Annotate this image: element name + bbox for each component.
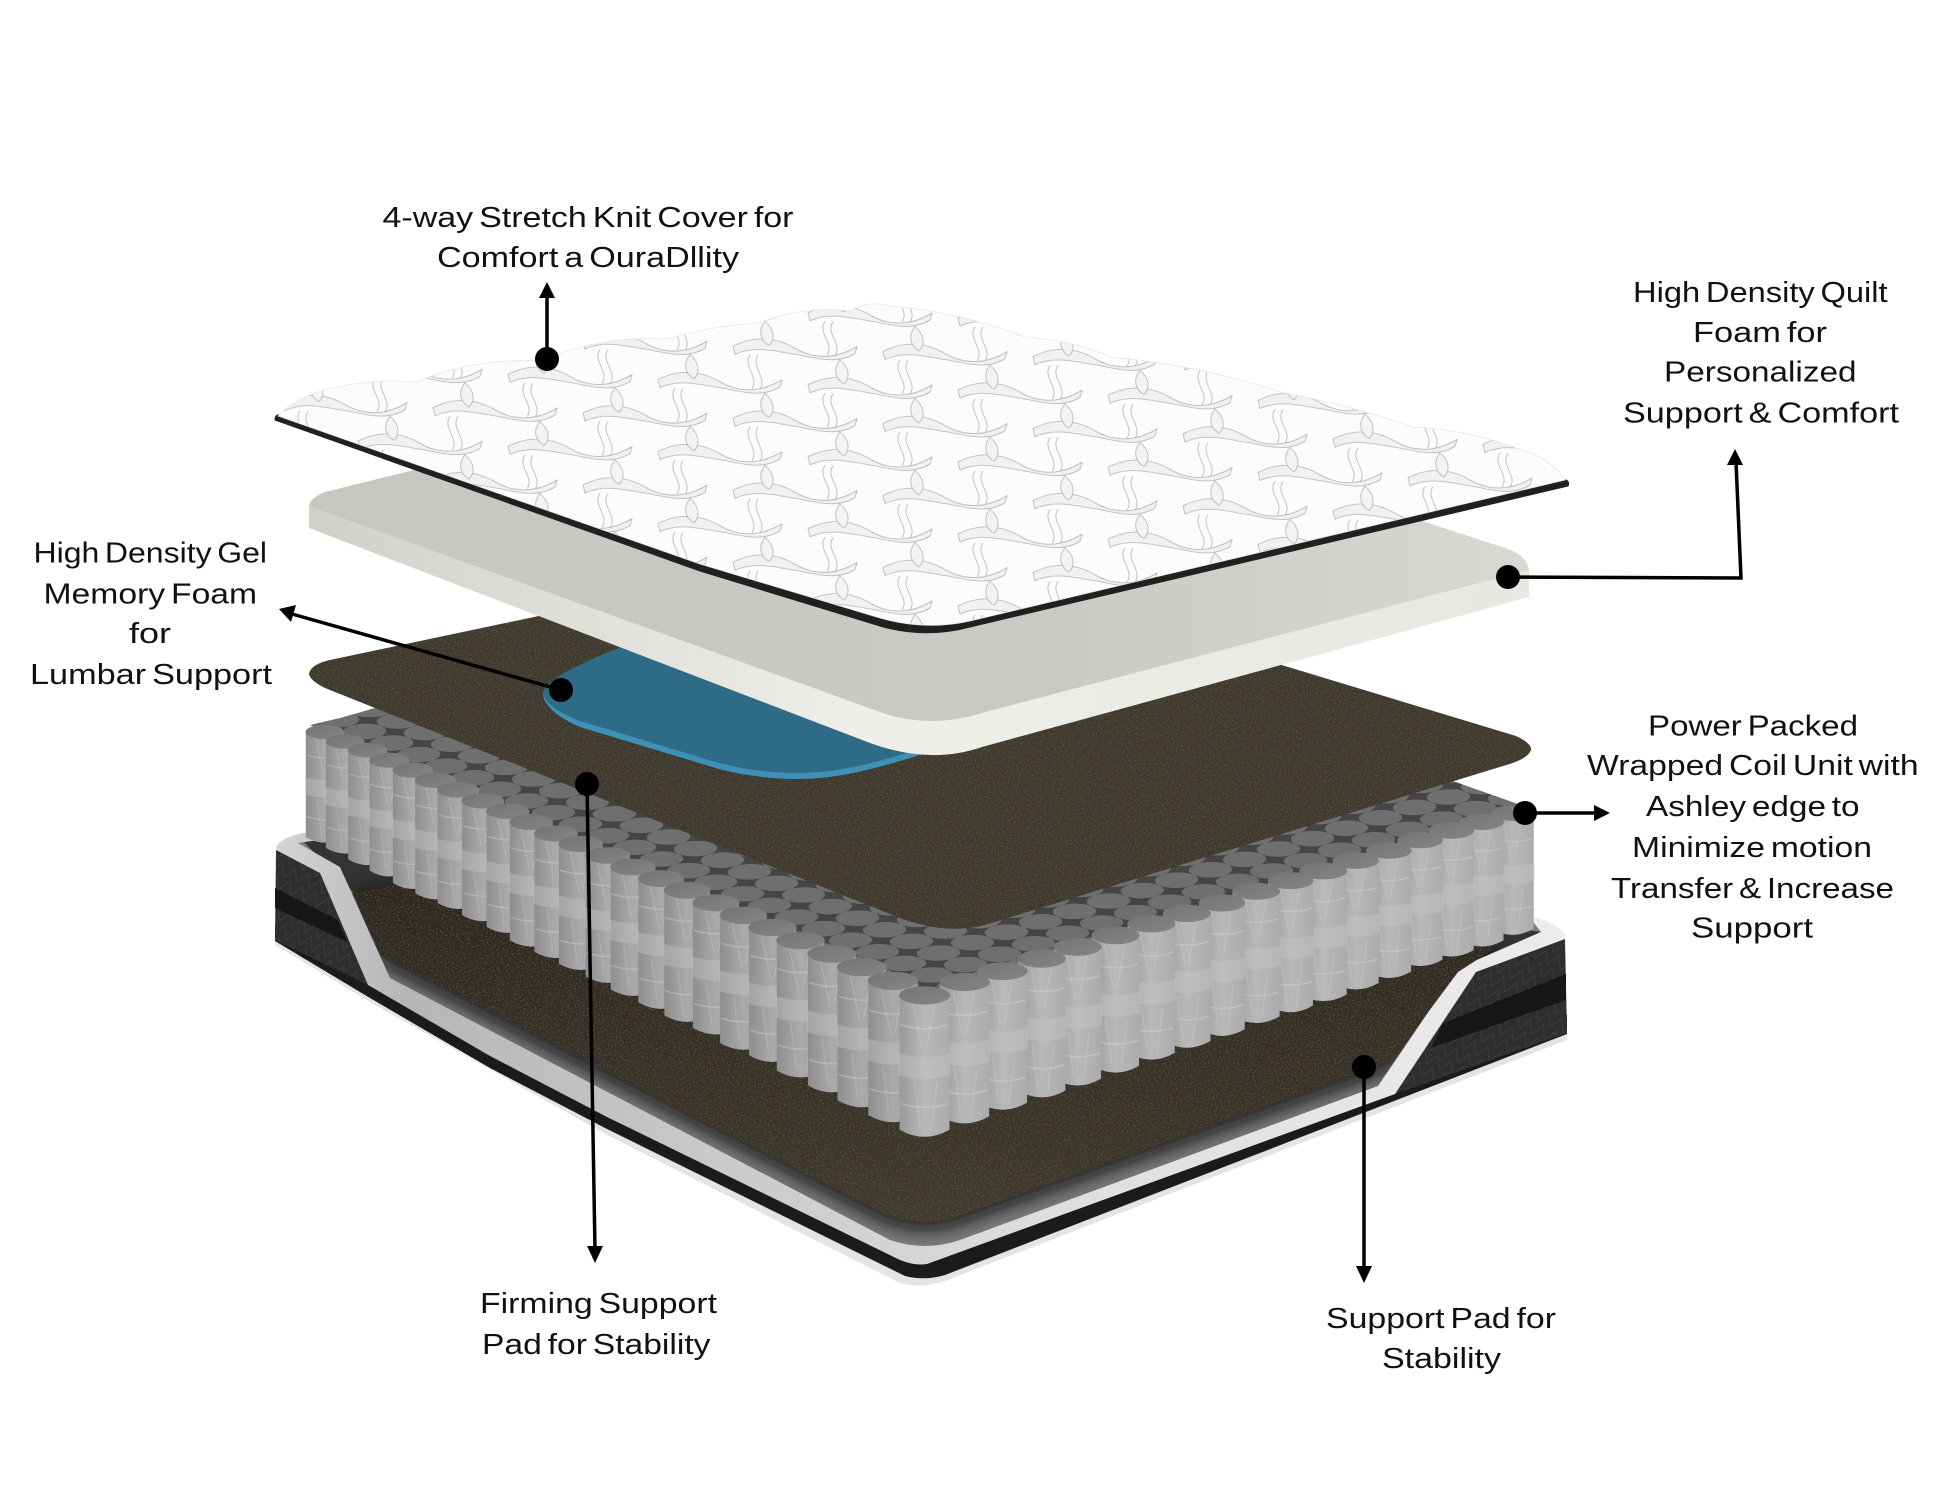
left coil row <box>305 725 918 1122</box>
callout: support pad label: Stability <box>1382 1343 1502 1375</box>
callout: knit cover label: 4-way Stretch Knit Cover for <box>382 202 794 234</box>
callout: quilt foam label <box>1623 277 1899 430</box>
callout: quilt foam label: Foam for <box>1693 317 1827 349</box>
callout: coil unit label: Wrapped Coil Unit with <box>1587 750 1919 782</box>
callout: gel memory foam label <box>30 538 272 691</box>
callout: coil unit label: Power Packed <box>1648 710 1858 742</box>
callout: coil unit label <box>1587 710 1919 945</box>
callout: firming pad label: Pad for Stability <box>482 1329 711 1361</box>
coil tops lattice <box>310 650 1535 1020</box>
tray floor <box>298 840 1541 1246</box>
front corner coil <box>899 986 951 1137</box>
callout: gel memory foam label: Memory Foam <box>44 579 257 611</box>
knit cover top layer <box>275 304 1569 633</box>
callout: quilt foam arrow <box>1496 449 1743 589</box>
callout: knit cover label: Comfort a OuraDllity <box>437 242 740 274</box>
wrapped coil unit <box>305 650 1535 1137</box>
right coil row <box>939 805 1535 1123</box>
callout: quilt foam label: High Density Quilt <box>1633 277 1888 309</box>
right foam wedge <box>1395 939 1567 1094</box>
quilt foam layer <box>309 350 1529 755</box>
callout: gel memory foam label: for <box>129 618 171 650</box>
callout: support pad label <box>1326 1303 1556 1375</box>
callout: quilt foam label: Support & Comfort <box>1623 398 1899 430</box>
callout: coil unit label: Transfer & Increase <box>1611 873 1894 905</box>
callout: firming pad label: Firming Support <box>480 1288 717 1320</box>
left foam wedge <box>275 850 368 985</box>
gel memory foam lumbar insert <box>543 640 935 779</box>
callout: quilt foam label: Personalized <box>1664 356 1856 388</box>
callout: coil unit label: Support <box>1691 913 1813 945</box>
mattress illustration <box>275 304 1570 1286</box>
lower support pad <box>352 800 1500 1222</box>
callout: support pad arrow <box>1352 1055 1376 1283</box>
infographic canvas <box>32 206 1916 1374</box>
callout: gel memory foam arrow <box>279 605 573 702</box>
callout: gel memory foam label: High Density Gel <box>34 538 267 570</box>
base tray with foam encasement <box>275 832 1567 1286</box>
callout: coil unit arrow <box>1513 801 1610 825</box>
callout: gel memory foam label: Lumbar Support <box>30 659 272 691</box>
callout: knit cover arrow <box>535 282 559 371</box>
callout: coil unit label: Minimize motion <box>1632 832 1872 864</box>
firming support pad <box>309 582 1531 929</box>
callout: support pad label: Support Pad for <box>1326 1303 1556 1335</box>
callout: knit cover label <box>382 202 794 274</box>
callout: firming pad arrow <box>575 772 603 1263</box>
callout: firming pad label <box>480 1288 717 1361</box>
callout: coil unit label: Ashley edge to <box>1646 791 1860 823</box>
